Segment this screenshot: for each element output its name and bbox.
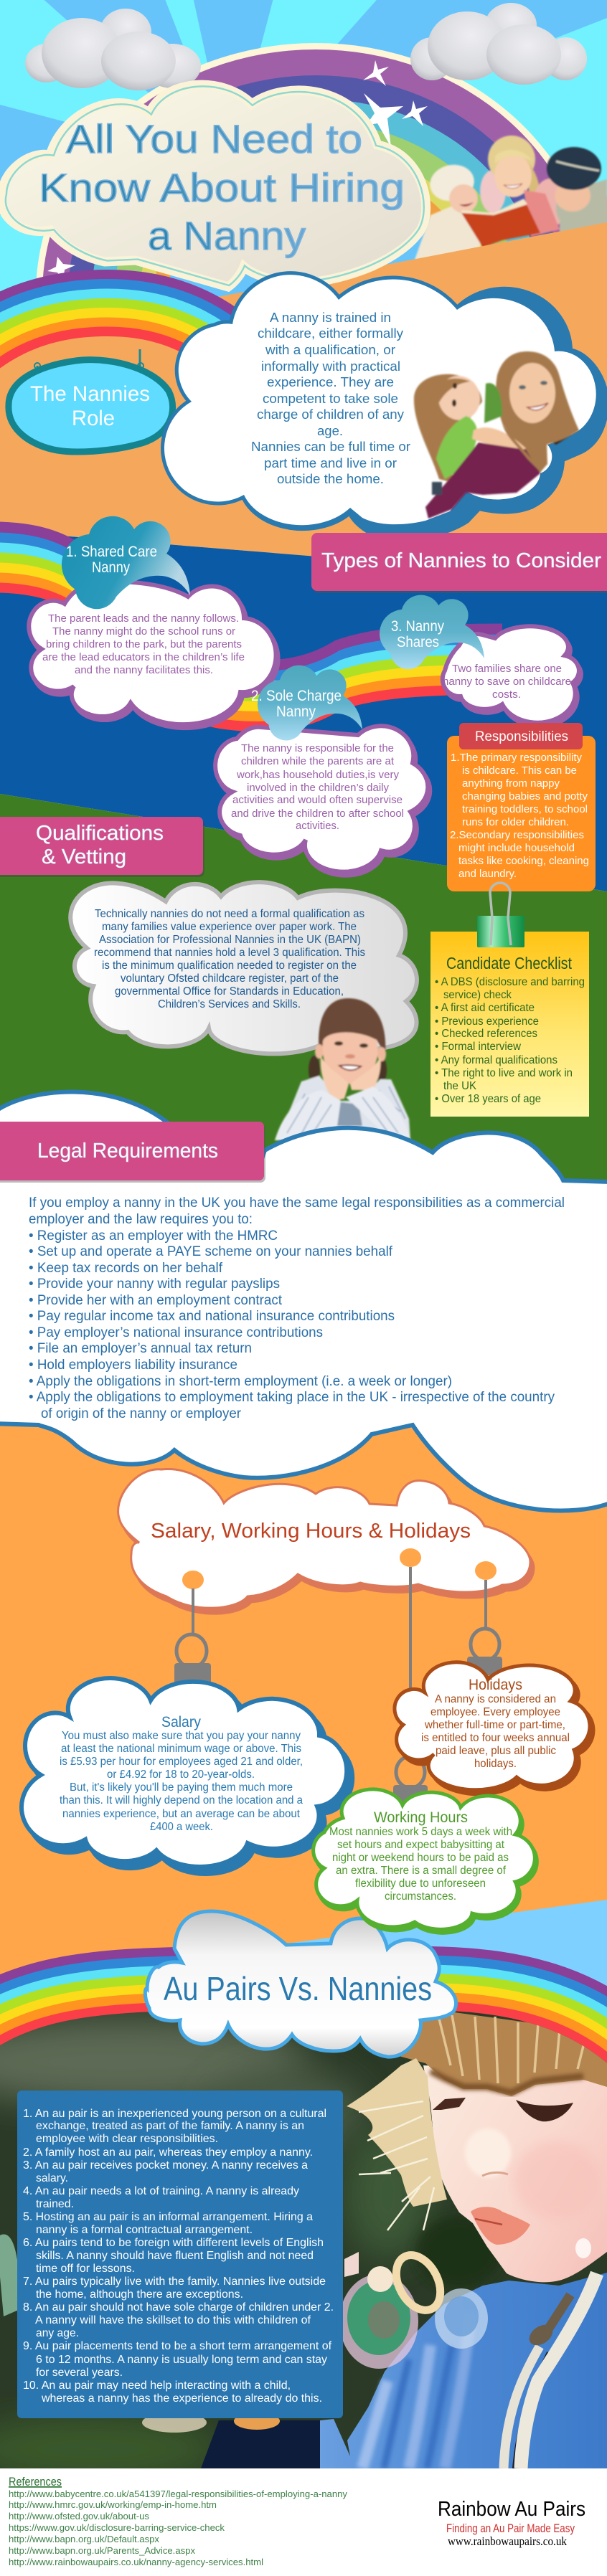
working hours text: circumstances.: [385, 1890, 456, 1903]
checklist items: • A first aid certificate: [435, 1002, 535, 1014]
responsibilities text: might include household: [458, 842, 575, 854]
qualification text: many families value experience over paper work. The: [102, 921, 357, 933]
photo: nanny reading to two children: [415, 136, 607, 265]
sign: The Nannies Role: The Nannies: [30, 382, 150, 406]
references list: http://www.babycentre.co.uk/a541397/legal-responsibilities-of-employing-a-nanny: [9, 2489, 347, 2499]
panel: Candidate Checklist note: [430, 932, 589, 1117]
responsibilities heading tab: [459, 723, 583, 749]
working hours text: an extra. There is a small degree of: [336, 1865, 507, 1877]
panel: Holidays: Holidays: [469, 1677, 522, 1693]
qualification text: is the minimum qualification needed to register on the: [102, 960, 357, 972]
shared care text: The nanny might do the school runs or: [52, 625, 235, 638]
lips: [471, 2207, 530, 2245]
panel: Au Pairs vs Nannies list: employee with clear responsibilities.: [36, 2133, 218, 2145]
heading cloud: Salary, Working Hours & Holidays: [118, 1469, 534, 1614]
legal requirements text: [29, 1195, 565, 1421]
heading cloud: Au Pairs Vs. Nannies: Au Pairs Vs. Nannies: [164, 1970, 432, 2007]
panel: Au Pairs vs Nannies list: 10. An au pair may need help interacting with a child,: [23, 2380, 291, 2392]
working hours text: Most nannies work 5 days a week with: [329, 1826, 512, 1838]
checklist items: • A DBS (disclosure and barring: [435, 976, 585, 988]
panel: Au Pairs vs Nannies list: any age.: [36, 2327, 79, 2339]
panel: Au Pairs vs Nannies list: 8. An au pair should not have sole charge of children under 2.: [23, 2301, 334, 2314]
background: green diagonal band: [0, 794, 607, 1190]
intro text: Nannies can be full time or: [251, 440, 410, 454]
background: orange diagonal band: [0, 222, 607, 580]
holidays text: paid leave, plus all public: [436, 1745, 556, 1757]
panel: Salary: [22, 1678, 352, 1874]
intro text: A nanny is trained in: [270, 311, 391, 325]
legal requirements text: • Pay regular income tax and national insurance contributions: [29, 1309, 395, 1324]
panel: qualification cloud: [70, 882, 417, 1053]
salary text: is £5.93 per hour for employees aged 21 and older,: [60, 1756, 303, 1768]
responsibilities text: 2.Secondary responsibilities: [450, 829, 584, 841]
sole charge text: activities and would often supervise: [232, 794, 403, 806]
title heading: Know About Hiring: [39, 165, 405, 210]
holidays text: holidays.: [474, 1758, 517, 1770]
hair fringe: [399, 2008, 607, 2096]
heading cloud: Salary, Working Hours & Holidays: Salary, Working Hours & Holidays: [151, 1520, 471, 1543]
panel: Au Pairs vs Nannies list: 5. Hosting an au pair is an informal arrangement. Hiring a: [23, 2211, 313, 2223]
background: blue diagonal band: [0, 531, 607, 891]
working hours text: night or weekend hours to be paid as: [332, 1852, 509, 1864]
panel: 2. Sole Charge Nanny: [215, 666, 430, 876]
sole charge text: activities.: [296, 820, 339, 832]
responsibilities text: 1.The primary responsibility: [451, 752, 582, 764]
salary text: or £4.92 for 18 to 20-year-olds.: [107, 1768, 255, 1781]
working hours text: [329, 1826, 512, 1903]
responsibilities text: training toddlers, to school: [462, 803, 588, 815]
face: [423, 2065, 607, 2282]
panel: 1. Shared Care Nanny: [29, 516, 278, 728]
panel: Au Pairs vs Nannies list: 4. An au pair needs a lot of training. A nanny is already: [23, 2185, 299, 2197]
icon: green binder clip: [477, 883, 524, 947]
checklist items: • Over 18 years of age: [435, 1093, 541, 1105]
legal requirements text: • Apply the obligations to employment taking place in the UK - irrespective of the country: [29, 1390, 555, 1405]
intro text: competent to take sole: [263, 392, 398, 406]
panel: Au Pairs vs Nannies list: exchange, treated as part of the family. A nanny is an: [36, 2120, 304, 2132]
qualification text: Children’s Services and Skills.: [158, 998, 301, 1010]
responsibilities text: tasks like cooking, cleaning: [458, 855, 589, 867]
sole charge heading cloud: 2. Sole Charge: [251, 688, 342, 704]
heading bar: Legal Requirements: Legal Requirements: [37, 1140, 218, 1162]
panel: Au Pairs vs Nannies list: salary.: [36, 2172, 68, 2184]
qualification text: governmental Office for Standards in Education,: [115, 985, 344, 998]
salary text: at least the national minimum wage or above. This: [61, 1743, 301, 1755]
sole charge text: children while the parents are at: [241, 755, 395, 767]
legal requirements text: • Register as an employer with the HMRC: [29, 1228, 278, 1244]
intro text: with a qualification, or: [265, 343, 395, 357]
references list: http://www.bapn.org.uk/Default.aspx: [9, 2534, 159, 2544]
logo: Rainbow Au Pairs: www.rainbowaupairs.co.uk: [448, 2534, 567, 2548]
holidays text: whether full-time or part-time,: [424, 1719, 565, 1731]
rainbow: winding band through the nanny types: [0, 527, 502, 726]
background: sky with sunburst rays: [0, 0, 607, 881]
checklist items: • Checked references: [435, 1028, 537, 1040]
panel: Au Pairs vs Nannies list: the home, although there are exceptions.: [36, 2288, 243, 2301]
footer: white background: [0, 2468, 607, 2576]
sign: The Nannies Role: [9, 349, 173, 452]
panel: Au Pairs vs Nannies list: [17, 2090, 343, 2418]
panel: Holidays: [395, 1662, 593, 1794]
panel: Au Pairs vs Nannies list: 6 to 12 months. A nanny is usually long term and can stay: [36, 2354, 327, 2366]
shared care text: are the lead educators in the children’s life: [42, 651, 245, 663]
intro text: experience. They are: [267, 375, 394, 389]
sole charge heading cloud: [251, 666, 362, 741]
panel: Responsibilities: [447, 723, 596, 891]
shared care heading cloud: [62, 516, 190, 609]
sole charge text: involved in the children’s daily: [247, 782, 389, 794]
panel: Au Pairs vs Nannies list: 6. Au pairs tend to be foreign with different levels of English: [23, 2237, 324, 2249]
rainbow: top-left arch: [0, 336, 244, 534]
shared care text: bring children to the park, but the parents: [46, 638, 242, 650]
references list: http://www.bapn.org.uk/Parents_Advice.aspx: [9, 2545, 195, 2556]
zipper strips: [504, 2347, 540, 2468]
legal requirements text: • Provide her with an employment contract: [29, 1293, 283, 1308]
legal requirements text: If you employ a nanny in the UK you have the same legal responsibilities as a commercial: [29, 1195, 565, 1211]
panel: Salary: Salary: [161, 1714, 201, 1730]
references list: http://www.rainbowaupairs.co.uk/nanny-agency-services.html: [9, 2557, 263, 2567]
nanny shares heading cloud: [380, 595, 484, 669]
bubble wand ring: [392, 2251, 445, 2314]
panel: Working Hours: Working Hours: [374, 1809, 468, 1826]
legal requirements text: employer and the law requires you to:: [29, 1212, 253, 1227]
qualification text: recommend that nannies hold a level 3 qualification. This: [94, 947, 365, 959]
checklist items: • Any formal qualifications: [435, 1054, 557, 1066]
legal requirements text: • File an employer’s annual tax return: [29, 1341, 252, 1356]
responsibilities heading tab: Responsibilities: [475, 729, 568, 744]
cloud: grey right: [410, 3, 587, 85]
sole charge text: and drive the children to after school: [231, 808, 404, 820]
sole charge text: work,has household duties,is very: [236, 769, 399, 781]
panel: Au Pairs vs Nannies list: 2. A family host an au pair, whereas they employ a nanny.: [23, 2146, 313, 2159]
responsibilities text: [450, 752, 589, 880]
salary text: You must also make sure that you pay your nanny: [62, 1730, 301, 1742]
bubbles: [339, 2274, 418, 2369]
checklist items: • The right to live and work in: [435, 1067, 573, 1079]
shared care heading cloud: 1. Shared Care: [66, 544, 157, 560]
sole charge heading cloud: Nanny: [276, 704, 316, 720]
panel: Au Pairs vs Nannies list: trained.: [36, 2198, 74, 2210]
holidays text: A nanny is considered an: [435, 1693, 556, 1705]
panel: 3. Nanny Shares: [380, 595, 581, 726]
working hours text: set hours and expect babysitting at: [337, 1839, 505, 1851]
legal requirements text: of origin of the nanny or employer: [41, 1406, 242, 1421]
panel: Au Pairs vs Nannies list: for several years.: [36, 2367, 123, 2379]
nanny shares heading cloud: 3. Nanny: [391, 618, 444, 635]
logo: Rainbow Au Pairs: Finding an Au Pair Made Easy: [446, 2521, 575, 2535]
title heading: [39, 116, 405, 258]
sole charge text: [231, 742, 404, 832]
panel: Au Pairs vs Nannies list: A nanny will have the skillset to do this with children of: [35, 2314, 311, 2326]
intro text: age.: [317, 424, 343, 438]
salary text: nannies experience, but an average can be about: [62, 1808, 301, 1820]
responsibilities text: is childcare. This can be: [462, 764, 577, 777]
working hours text: flexibility due to unforeseen: [355, 1877, 486, 1890]
holidays text: [421, 1693, 570, 1770]
legal requirements text: • Set up and operate a PAYE scheme on your nannies behalf: [29, 1244, 393, 1259]
panel: Au Pairs vs Nannies list: time off for lessons.: [36, 2263, 135, 2275]
heading bar: Types of Nannies to Consider: [311, 533, 607, 593]
logo: Rainbow Au Pairs: Rainbow Au Pairs: [438, 2498, 585, 2521]
panel: Au Pairs vs Nannies list: skills. A nanny should have fluent English and not need: [36, 2250, 314, 2262]
nanny shares text: Two families share one: [452, 663, 562, 675]
intro text: childcare, either formally: [258, 326, 403, 341]
heading cloud: Au Pairs Vs. Nannies: [145, 1911, 456, 2057]
photo: nanny carrying a girl: [414, 351, 579, 518]
shared care text: and the nanny facilitates this.: [75, 664, 213, 676]
heading bar: Types of Nannies to Consider: Types of Nannies to Consider: [321, 549, 601, 572]
checklist items: service) check: [443, 989, 512, 1001]
responsibilities text: changing babies and potty: [462, 790, 588, 802]
holidays text: employee. Every employee: [430, 1706, 560, 1718]
logo: Rainbow Au Pairs: [438, 2498, 585, 2548]
panel: Au Pairs vs Nannies list: 1. An au pair is an inexperienced young person on a cultural: [23, 2108, 326, 2120]
shared care text: [42, 612, 245, 676]
references list: [9, 2475, 347, 2567]
checklist items: the UK: [443, 1080, 477, 1092]
background: orange lower section: [0, 1420, 607, 2008]
panel: Candidate Checklist note: Candidate Checklist: [446, 954, 573, 972]
jacket: [320, 2266, 607, 2468]
panel: Legal Requirements white cloud: [0, 1092, 607, 1511]
holidays text: is entitled to four weeks annual: [421, 1732, 570, 1744]
hanging dots: [182, 1548, 497, 1589]
big pastel rainbow behind the title: [36, 43, 596, 545]
title heading: a Nanny: [148, 213, 306, 258]
checklist items: • Formal interview: [435, 1041, 522, 1053]
qualification text: [94, 908, 365, 1010]
rainbow: lower arch: [0, 2010, 607, 2087]
legal requirements text: • Hold employers liability insurance: [29, 1358, 237, 1373]
panel: Au Pairs vs Nannies list: whereas a nanny has the experience to already do this.: [41, 2392, 322, 2405]
sole charge text: The nanny is responsible for the: [241, 742, 394, 754]
references list: References: [9, 2475, 62, 2489]
panel: Au Pairs vs Nannies list: 7. Au pairs typically live with the family. Nannies live outside: [23, 2276, 326, 2288]
icon: sparkles on the rainbow: [47, 60, 428, 281]
intro text: informally with practical: [261, 359, 400, 374]
checklist items: [435, 976, 585, 1105]
title cloud: [1, 85, 426, 287]
salary text: But, it's likely you'll be paying them much more: [70, 1781, 293, 1794]
panel: Au Pairs vs Nannies list: 9. Au pair placements tend to be a short term arrangement of: [23, 2340, 332, 2352]
intro text: [251, 311, 410, 486]
shared care text: The parent leads and the nanny follows.: [48, 612, 239, 625]
qualification text: Technically nannies do not need a formal qualification as: [95, 908, 364, 920]
salary text: than this. It will highly depend on the location and a: [60, 1794, 303, 1806]
legal requirements text: • Keep tax records on her behalf: [29, 1261, 223, 1276]
panel: Au Pairs vs Nannies list: 3. An au pair receives pocket money. A nanny receives a: [23, 2159, 308, 2172]
salary text: [60, 1730, 303, 1833]
nanny shares text: [443, 663, 571, 701]
sign: The Nannies Role: Role: [72, 407, 115, 430]
photo: boy resting chin on hands: [275, 998, 410, 1140]
shared care heading cloud: Nanny: [92, 559, 130, 576]
panel: Au Pairs vs Nannies list: nanny is a formal contractual arrangement.: [36, 2224, 253, 2236]
nanny shares text: nanny to save on childcare: [443, 676, 571, 688]
responsibilities text: anything from nappy: [462, 777, 560, 790]
nanny shares heading cloud: Shares: [397, 634, 439, 650]
intro text: outside the home.: [277, 472, 384, 486]
legal requirements text: • Provide your nanny with regular payslips: [29, 1277, 280, 1292]
intro text: charge of children of any: [257, 407, 404, 422]
panel: light blue corner behind Au Pairs: [287, 1900, 607, 2151]
cloud: grey left: [25, 9, 201, 90]
salary text: £400 a week.: [150, 1821, 213, 1833]
title heading: All You Need to: [66, 116, 362, 161]
references list: http://www.ofsted.gov.uk/about-us: [9, 2511, 149, 2521]
panel: Working Hours: [314, 1789, 537, 1933]
heading bar: Qualifications & Vetting: & Vetting: [42, 846, 126, 868]
legal requirements text: • Pay employer’s national insurance contributions: [29, 1325, 323, 1340]
blond side hair: [347, 2058, 447, 2207]
legal requirements text: • Apply the obligations in short-term employment (i.e. a week or longer): [29, 1374, 452, 1389]
heading bar: Legal Requirements: [0, 1122, 265, 1183]
references list: https://www.gov.uk/disclosure-barring-service-check: [9, 2522, 225, 2533]
nanny shares text: costs.: [492, 688, 521, 701]
heading bar: Qualifications & Vetting: [0, 817, 204, 877]
qualification text: voluntary Ofsted childcare register, part of the: [121, 972, 339, 985]
checklist items: • Previous experience: [435, 1015, 539, 1028]
heading bar: Qualifications & Vetting: Qualifications: [36, 822, 164, 845]
qualification text: Association for Professional Nannies in the UK (BAPN): [99, 934, 361, 946]
photo: child blowing bubbles: [0, 2001, 607, 2481]
references list: http://www.hmrc.gov.uk/working/emp-in-home.htm: [9, 2499, 217, 2510]
icon: ornament hangers: [174, 1567, 502, 1802]
responsibilities text: runs for older children.: [462, 816, 569, 828]
intro text: part time and live in or: [264, 456, 397, 470]
responsibilities text: and laundry.: [458, 868, 517, 880]
panel: intro cloud with photo: [164, 275, 606, 537]
closed eyes: [433, 2098, 466, 2110]
